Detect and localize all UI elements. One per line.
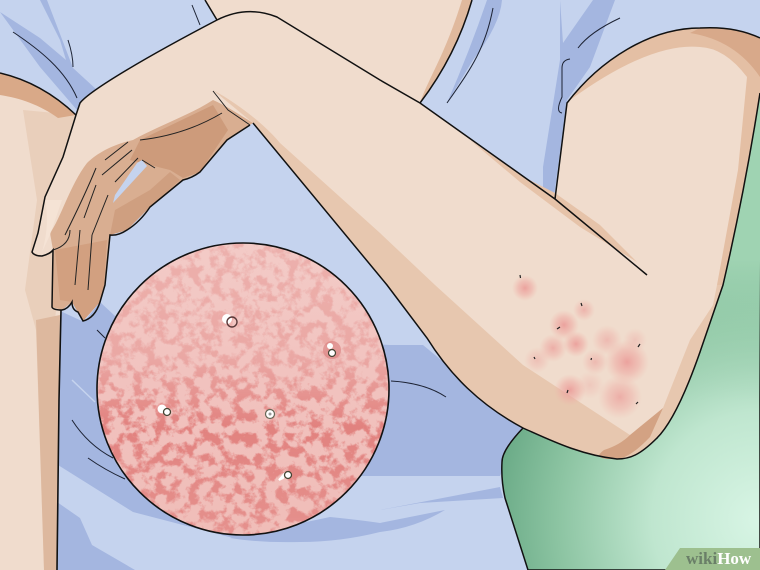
left arm xyxy=(0,73,76,570)
upper arm shadow xyxy=(567,28,760,285)
pimples xyxy=(158,314,341,480)
wikiHow badge: wikiHow xyxy=(686,549,752,568)
crease shadow xyxy=(470,140,637,262)
neck and chest xyxy=(205,0,472,103)
hand shade xyxy=(50,100,253,321)
outline xyxy=(32,12,760,459)
hand creases xyxy=(53,91,250,290)
magnified skin circle xyxy=(96,242,390,536)
wikiHow badge xyxy=(665,548,760,570)
gap between fingers xyxy=(113,160,147,203)
green background object xyxy=(502,90,760,570)
rash on elbow xyxy=(512,275,649,419)
arm silhouette: forearm, elbow, upper arm and hand xyxy=(32,12,760,459)
forearm shadow band xyxy=(213,90,723,459)
